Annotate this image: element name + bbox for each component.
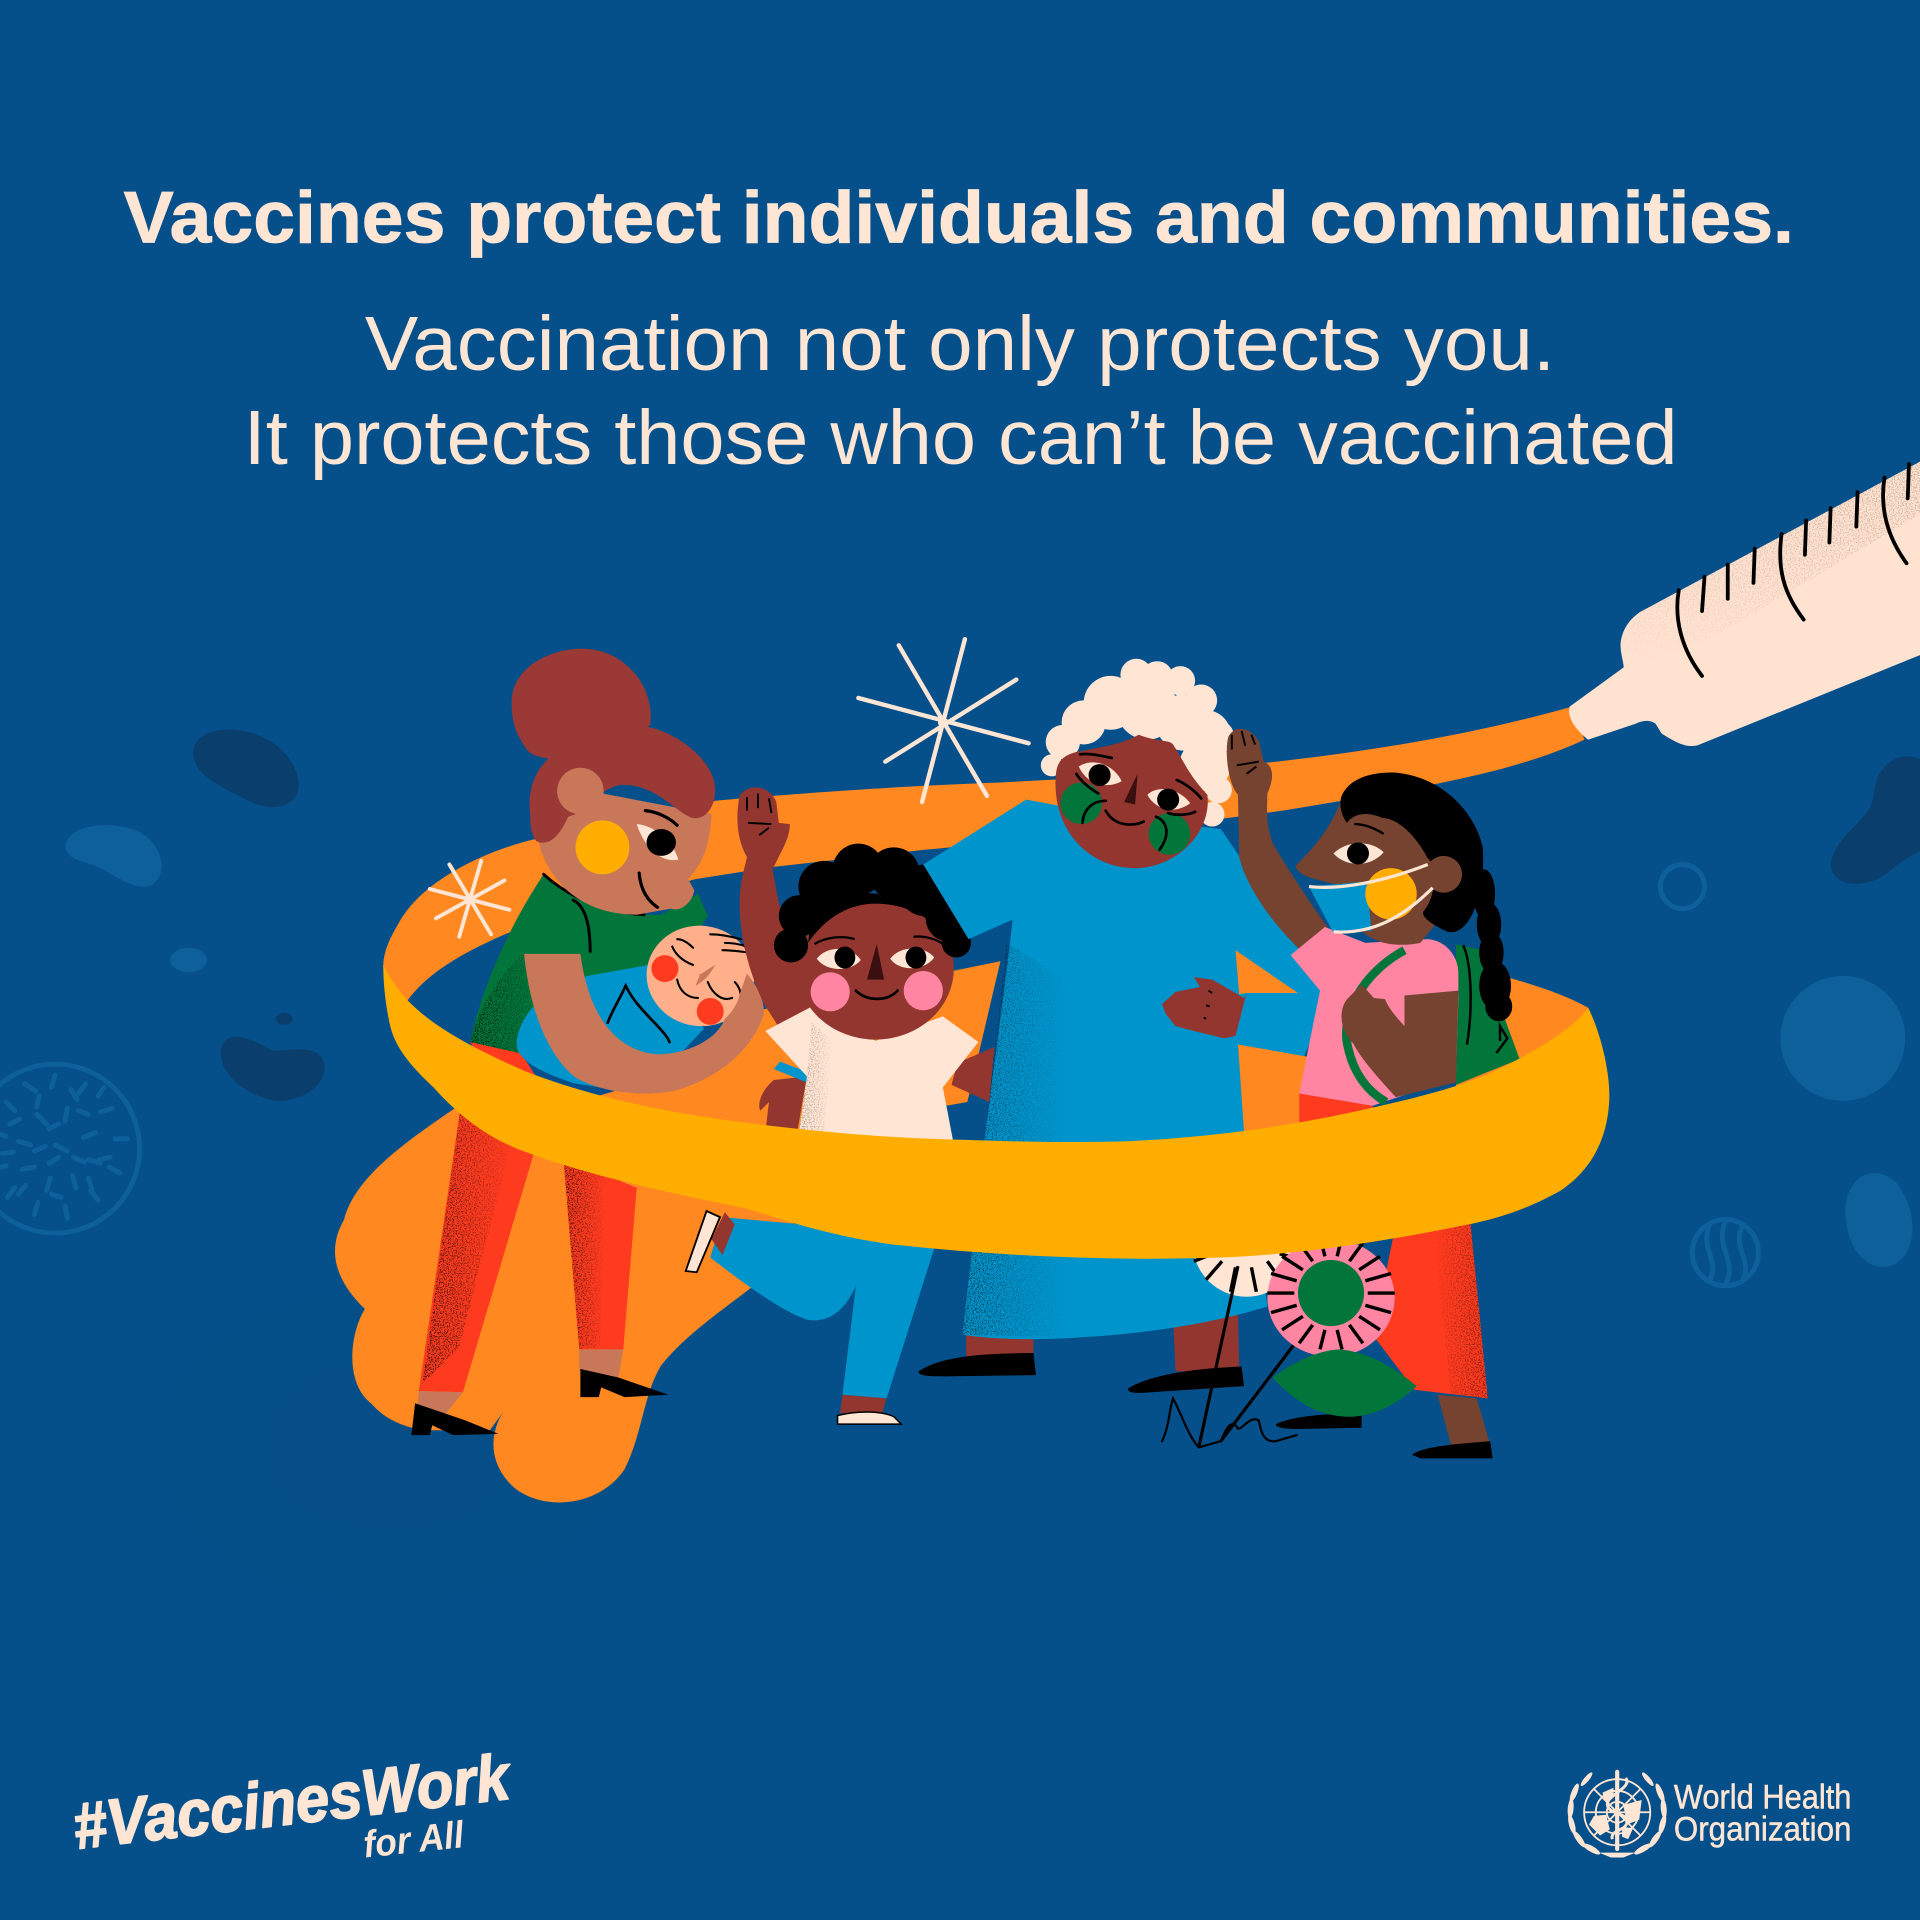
syringe shading	[1621, 462, 1920, 667]
mother blouse hem	[470, 1042, 545, 1090]
face mask	[1309, 882, 1371, 933]
plant: stems	[1199, 1266, 1313, 1447]
mother brow and smile	[639, 811, 677, 907]
child brows	[814, 937, 945, 947]
rod and serpent	[1615, 1772, 1619, 1849]
person: masked girl with backpack	[1227, 729, 1520, 1458]
girl hair	[1340, 773, 1483, 932]
mother hair	[530, 726, 715, 843]
microbe: dashed circle	[0, 1064, 140, 1233]
child nose	[867, 944, 884, 980]
child trousers	[710, 1217, 938, 1398]
star: small sparkle	[430, 861, 509, 937]
continents	[1589, 1788, 1642, 1839]
orange ribbon: inner right end	[1456, 965, 1588, 1092]
girl shoe	[1412, 1441, 1493, 1458]
mother arm	[524, 954, 764, 1094]
hashtag logo	[69, 1740, 516, 1867]
syringe	[1569, 462, 1920, 746]
WHO logo	[1567, 1771, 1851, 1858]
person: child	[686, 787, 994, 1424]
girl raised arm	[1227, 729, 1329, 949]
blob: light left	[66, 825, 162, 887]
title: Vaccines protect individuals and communities.	[124, 175, 1794, 258]
girl skirt	[1373, 1212, 1488, 1398]
dress shading	[962, 943, 1065, 1337]
mother cheek	[576, 820, 629, 874]
child ankle	[840, 1395, 887, 1416]
baby swaddle	[517, 965, 704, 1093]
ring: small outline	[1660, 864, 1704, 909]
child raised arm	[737, 787, 820, 1035]
orange gap below arm	[1238, 1044, 1308, 1133]
WHO emblem	[1567, 1771, 1668, 1858]
artist signature	[1162, 1398, 1297, 1447]
girl bent arm	[1342, 984, 1458, 1097]
mother ear	[557, 768, 604, 814]
girl brow	[1354, 824, 1384, 834]
grandmother nose	[1124, 774, 1138, 804]
hashtag: #VaccinesWork	[69, 1740, 516, 1863]
plant: cream flower	[1193, 1189, 1300, 1297]
child cheeks	[811, 972, 850, 1011]
child sleeve edge	[774, 1062, 809, 1082]
child palm lines	[747, 793, 771, 835]
child rear shoe	[686, 1211, 720, 1272]
girl rear shoe	[1276, 1414, 1362, 1429]
background texture: microbes and blobs	[0, 729, 1920, 1286]
blob: light lower-right	[1845, 1173, 1913, 1267]
grandmother legs	[966, 1329, 1033, 1357]
grandmother eyes	[1079, 762, 1122, 785]
yellow ribbon: front band	[383, 965, 1609, 1259]
girl pink shirt	[1291, 927, 1458, 1106]
braid	[1473, 869, 1512, 1021]
child shoe	[838, 1412, 901, 1424]
mother green shirt	[470, 874, 708, 1053]
dot: dark	[276, 1013, 293, 1025]
girl ear	[1425, 856, 1462, 893]
plant: green leaf	[1272, 1349, 1417, 1417]
WHO wordmark line 2: Organization	[1674, 1810, 1851, 1848]
subtitle line 1: Vaccination not only protects you.	[365, 301, 1555, 387]
subtitle line 2: It protects those who can’t be vaccinated	[244, 395, 1678, 481]
backpack strap	[1346, 950, 1404, 1102]
for all: for All	[361, 1814, 467, 1867]
mother face	[536, 784, 711, 915]
blob: dark lower-left	[221, 1037, 325, 1101]
microbe: striped	[1692, 1220, 1758, 1286]
WHO wordmark line 1: World Health	[1674, 1779, 1851, 1817]
person: grandmother	[918, 659, 1335, 1393]
child smile	[856, 991, 898, 999]
child lower arms	[759, 1076, 807, 1133]
girl palm lines	[1232, 731, 1259, 774]
child rear ankle	[711, 1212, 735, 1255]
syringe tick marks	[1677, 464, 1909, 676]
grandmother dress	[923, 800, 1335, 1339]
mother shoes	[411, 1403, 498, 1435]
blob: dark right	[1831, 756, 1920, 884]
girl leg	[1438, 1395, 1490, 1445]
child t-shirt	[765, 1007, 978, 1145]
orange ribbon: back band from syringe	[383, 707, 1584, 1004]
mother eye	[637, 824, 678, 860]
mother trousers	[419, 1108, 536, 1392]
circle: light right	[1780, 976, 1905, 1101]
baby face lines	[672, 934, 755, 999]
mother hair bun	[512, 649, 651, 759]
girl skirt top	[1299, 1092, 1373, 1133]
laurel wreath	[1567, 1771, 1668, 1858]
grandmother wrinkles and smile	[1076, 754, 1201, 850]
grandmother cheeks	[1060, 782, 1102, 824]
dot: light left	[170, 948, 207, 972]
grandmother shoes	[918, 1353, 1036, 1376]
girl eye	[1333, 843, 1384, 864]
backpack	[1456, 944, 1520, 1085]
mask strings	[1309, 864, 1433, 932]
child eyes	[817, 949, 861, 969]
orange gap under arm	[1236, 950, 1298, 994]
mother ankles	[416, 1391, 463, 1416]
girl face	[1296, 801, 1445, 945]
baby cheeks	[651, 955, 678, 982]
grandmother hair	[1041, 659, 1234, 827]
child hair	[774, 844, 972, 962]
star: large sparkle	[858, 639, 1029, 802]
girl cheek	[1365, 868, 1417, 920]
baby head	[640, 919, 761, 1033]
orange blob: bottom-left swirl	[335, 961, 1000, 1502]
child face	[797, 898, 954, 1040]
grandmother face	[1056, 735, 1208, 868]
plant: pink flower	[1267, 1237, 1395, 1357]
person: mother with baby	[411, 649, 764, 1435]
blob: dark top-left	[193, 729, 299, 807]
soft shadow halo around illustration	[110, 1261, 673, 1629]
grandmother hand	[1162, 977, 1247, 1038]
